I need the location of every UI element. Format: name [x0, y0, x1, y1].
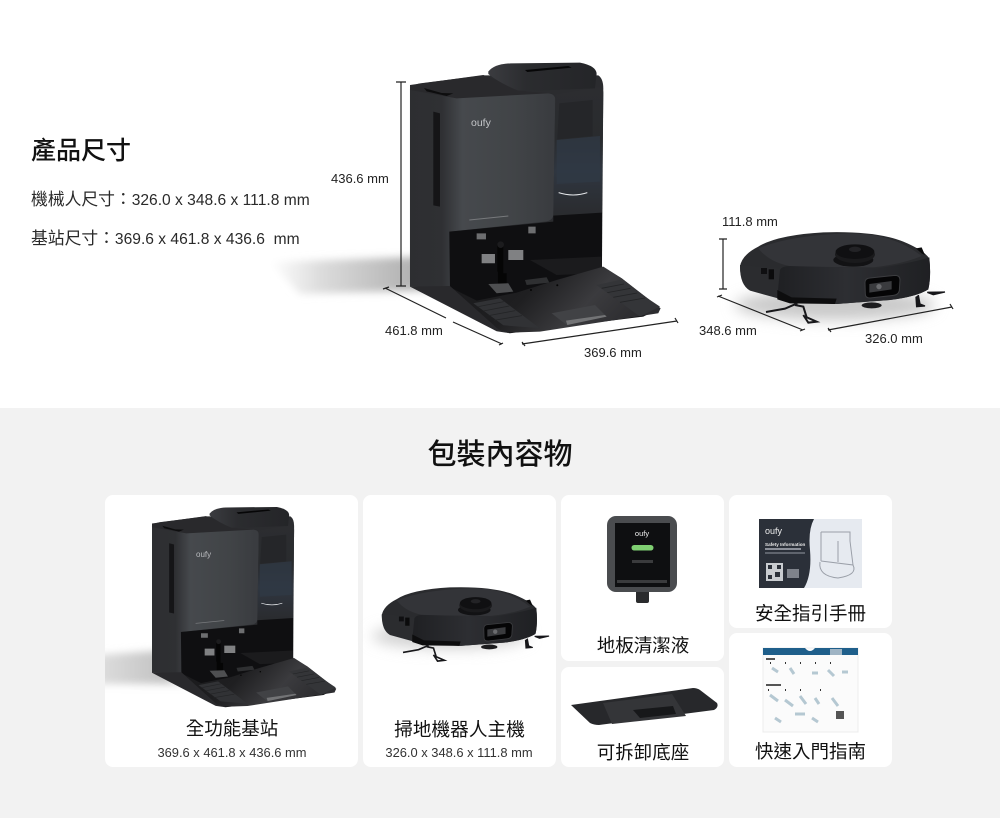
dimension line: width	[828, 304, 953, 332]
background: package contents section	[0, 408, 1000, 818]
guide name: 安全指引手冊	[755, 603, 866, 624]
icon: safety booklet: oufy	[765, 526, 783, 536]
dimension line: height	[396, 82, 406, 286]
icon: quick start sheet	[763, 648, 858, 732]
label: height: 111.8 mm	[722, 214, 778, 229]
robot product	[740, 232, 945, 323]
station size: 369.6 x 461.8 x 436.6 mm	[157, 745, 307, 760]
panel: robot vacuum	[363, 495, 556, 767]
heading: product dimensions: 產品尺寸	[31, 137, 131, 165]
text: robot dimensions: 機械人尺寸：326.0 x 348.6 x 111.8 mm	[31, 190, 310, 209]
image: robot vacuum with dimension lines	[699, 214, 953, 346]
icon: base plate	[571, 688, 718, 725]
floor shadow	[270, 256, 440, 294]
heading: package contents: 包裝內容物	[427, 438, 573, 471]
dimension line: depth	[383, 287, 503, 345]
robot image	[382, 587, 549, 661]
station logo: oufy	[196, 550, 211, 559]
base name: 可拆卸底座	[597, 742, 689, 763]
guide name: 快速入門指南	[755, 741, 866, 762]
robot shadow	[372, 623, 528, 649]
base station product	[410, 63, 661, 333]
background: top section	[0, 0, 1000, 408]
station shadow	[95, 650, 190, 684]
panel: floor cleaner	[561, 495, 724, 661]
panel: quick start guide	[729, 633, 892, 767]
robot shadow	[735, 290, 935, 320]
text: station dimensions: 基站尺寸：369.6 x 461.8 x 436.6 mm	[31, 229, 300, 248]
cleaner name: 地板清潔液	[597, 635, 689, 656]
icon: safety booklet: Safety Information	[765, 542, 806, 547]
dimension line: height	[719, 239, 727, 289]
icon: cleaner bottle: oufy	[635, 529, 649, 538]
label: depth: 461.8 mm	[385, 323, 443, 338]
station name: 全功能基站	[186, 718, 278, 739]
label: height: 436.6 mm	[331, 171, 389, 186]
dimension line: depth	[717, 295, 805, 331]
robot size: 326.0 x 348.6 x 111.8 mm	[385, 745, 533, 760]
label: width: 326.0 mm	[865, 331, 923, 346]
dimension line: width	[522, 318, 678, 346]
station image	[152, 507, 336, 707]
icon: safety booklet	[759, 519, 862, 588]
panel: detachable base	[561, 667, 724, 767]
icon: cleaner bottle	[607, 516, 677, 603]
label: width: 369.6 mm	[584, 345, 642, 360]
panel: base station	[95, 495, 358, 767]
brand logo: oufy	[471, 117, 492, 129]
panel: safety guide	[729, 495, 892, 628]
robot name: 掃地機器人主機	[394, 719, 525, 740]
image: base station with dimension lines	[270, 63, 678, 360]
label: depth: 348.6 mm	[699, 323, 757, 338]
